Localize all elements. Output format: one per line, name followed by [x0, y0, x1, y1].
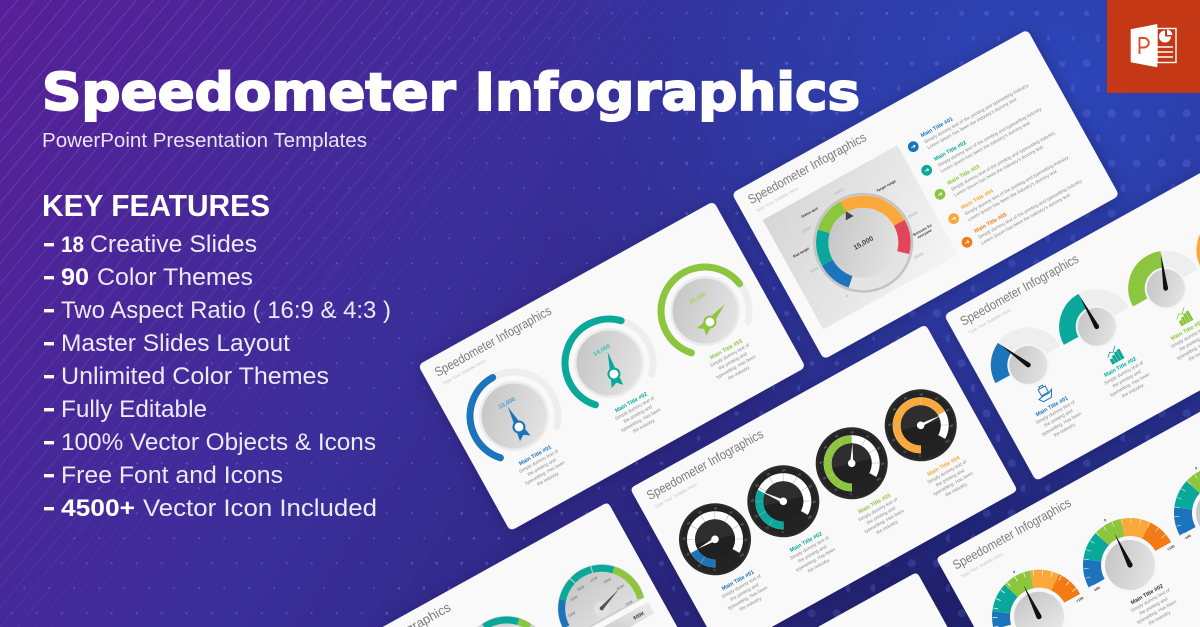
list item 2: Lorem Ipsum has been the industry's dummy text	[940, 120, 1031, 174]
gauge 1 text: Simply dummy text of	[518, 448, 560, 474]
multicolour gauge 3 partially visible: 0	[1194, 466, 1198, 471]
gauge 2 text: Simply dummy text of	[614, 395, 656, 421]
black gauge 3: 10	[833, 487, 838, 492]
black gauge 1: 50	[698, 509, 703, 515]
slide card and heading: Speedometer Infographics	[745, 129, 869, 207]
key features list: Creative Slides	[90, 231, 257, 258]
black gauge 1: 30	[682, 536, 687, 541]
black gauge 1: 100	[738, 552, 745, 558]
list item 5: Lorem Ipsum has been the industry's dummy text	[980, 192, 1072, 246]
panel: slide with needle dials	[418, 201, 806, 531]
gauge range labels: Target range	[876, 179, 897, 193]
multicolour gauge 3 partially visible: -100	[1183, 534, 1192, 541]
gauge 2: 14,000	[593, 343, 612, 358]
gauge 3 text	[706, 336, 760, 386]
multicolour gauge 2: -100	[1092, 586, 1101, 593]
list item 3: Main Title #03	[947, 164, 981, 187]
panel: slide with fan gauges	[944, 151, 1200, 481]
fan gauge 1 text: Main Title #01	[1035, 396, 1069, 418]
half dial gauge 2: 420K	[589, 575, 599, 583]
fan gauge 1 text: the industry.	[1053, 421, 1077, 438]
black gauge 2: 80	[808, 484, 813, 489]
black gauge 4: 60	[919, 392, 924, 397]
fan gauge 2 text	[1100, 354, 1154, 403]
black gauge 2 text: the industry.	[807, 557, 831, 573]
icon: chart green	[1174, 306, 1193, 326]
black gauge 2: 30	[750, 498, 755, 503]
fan gauge 2 text: the printing and	[1112, 369, 1142, 389]
key features list: Color Themes	[97, 264, 253, 291]
multicolour gauge 2 text: Simply dummy text of	[1130, 587, 1171, 613]
gauge range labels: Bad target	[792, 246, 811, 259]
icon: PowerPoint badge	[1107, 0, 1200, 93]
half dial gauge 2: 350K	[576, 584, 586, 592]
list item 5	[958, 172, 1087, 254]
black gauge 4: 100	[944, 438, 951, 444]
slide card and heading: Type Your Subtitle Here	[442, 358, 486, 386]
black gauge 1 text: Main Title #01	[721, 570, 755, 592]
key features list: 90	[61, 264, 89, 291]
key features list: 18	[61, 232, 84, 257]
black gauge 3 text	[854, 491, 908, 540]
list item 2	[918, 100, 1046, 182]
black gauge 1: 90	[744, 537, 749, 542]
list item 4: Simply dummy text of the printing and typesetting industry.	[964, 154, 1070, 216]
black gauge 2: 70	[797, 472, 802, 477]
multicolour gauge 2 text: the industry.	[1148, 609, 1172, 626]
panel: blank slide edge	[818, 574, 948, 627]
black gauge 3	[803, 414, 901, 512]
list item 5: Simply dummy text of the printing and typesetting industry.	[977, 178, 1084, 240]
black gauge 2: 40	[754, 483, 759, 488]
slide card and heading	[944, 151, 1200, 481]
gauge 3	[620, 226, 790, 396]
gauge range labels: Bonuses for	[912, 223, 933, 237]
gauge 3: 20,000	[689, 291, 708, 306]
black gauge 4 text: Simply dummy text of	[926, 459, 968, 485]
multicolour gauge 2 text: typesetting. Has been	[1136, 599, 1178, 625]
slide card clipped at the frame	[383, 504, 677, 627]
black gauge 2 text: Main Title #02	[789, 531, 823, 554]
multicolour gauge 2 text: the printing and	[1138, 596, 1169, 616]
fan gauge 1 text: the printing and	[1043, 408, 1074, 428]
black gauge 4: 20	[891, 438, 896, 443]
black gauge 3: 80	[876, 446, 882, 451]
black gauge 2: 20	[754, 514, 759, 519]
black gauge 1: 0	[713, 568, 716, 572]
list item 2: Main Title #02	[933, 140, 968, 163]
multicolour gauge 2: 0	[1103, 518, 1107, 523]
fan gauge 3	[1123, 244, 1200, 329]
black gauge 3: 40	[823, 445, 828, 450]
black gauge 3: 50	[834, 433, 839, 439]
fan gauge 2 text: typesetting. Has been	[1109, 371, 1151, 398]
panel: slide with half dials	[383, 504, 677, 627]
black gauge 2	[734, 452, 832, 550]
black gauge 1 text	[717, 567, 772, 617]
gauge 2 text: the printing and	[623, 404, 653, 424]
gauge 3 text: the industry.	[727, 364, 751, 381]
panel: slide with segmented ring and list	[732, 29, 1119, 359]
subtitle: PowerPoint Presentation Templates	[42, 130, 367, 152]
black gauge 1: 40	[686, 521, 691, 526]
fan gauge 4 partially visible	[1195, 211, 1200, 289]
gauge 3 text: the printing and	[718, 351, 748, 371]
key features list: Master Slides Layout	[61, 330, 290, 357]
gauge 2 text: typesetting. Has been	[620, 407, 662, 433]
multicolour gauge 2: +100	[1166, 544, 1175, 552]
gauge 1 text: typesetting. Has been	[524, 460, 566, 486]
black gauge 3 text: Simply dummy text of	[857, 496, 899, 522]
multicolour gauge 1 clipped at the frame: +100	[1075, 596, 1084, 603]
black gauge 1 text: the industry.	[739, 595, 763, 612]
list item 4: Lorem Ipsum has been the industry's dummy text	[967, 168, 1058, 222]
value box: 600K	[633, 610, 646, 622]
black gauge 4: 90	[949, 423, 954, 428]
key features list: Fully Editable	[61, 396, 207, 423]
black gauge 3 text: typesetting. Has been	[864, 508, 905, 534]
segmented ring gauge	[784, 164, 942, 322]
black gauge 2: 50	[766, 471, 771, 477]
black gauge 3: 60	[850, 430, 855, 435]
black gauge 3: 30	[818, 460, 823, 465]
multicolour gauge 2 text: Main Title #02	[1130, 584, 1164, 606]
key features list: Unlimited Color Themes	[61, 363, 329, 390]
black gauge 3: 20	[822, 476, 827, 481]
grey chart panel	[763, 145, 958, 329]
slide card and heading: Speedometer Infographics	[957, 251, 1081, 329]
gauge range labels: 5000	[810, 266, 819, 274]
list item 1: Main Title #01	[920, 116, 954, 139]
black gauge 4 text: typesetting. Has been	[933, 470, 974, 497]
gauge range labels: Status quo	[800, 206, 819, 219]
multicolour gauge 1 clipped at the frame	[995, 570, 1084, 627]
gauge 2 text	[611, 389, 665, 439]
gauge range labels	[792, 179, 935, 298]
half dial gauge 1 clipped at the frame	[478, 616, 536, 627]
key features list: Vector Icon Included	[143, 495, 377, 522]
black gauge 3 text: Main Title #03	[858, 493, 892, 516]
multicolour gauge 1 clipped at the frame: 0	[1012, 570, 1016, 574]
black gauge 3 text: the printing and	[866, 505, 896, 525]
key features list: 4500+	[61, 495, 135, 522]
list item 3	[931, 124, 1060, 206]
slide card and heading	[732, 29, 1119, 359]
fan gauge 2	[1053, 282, 1137, 367]
list item 3: Simply dummy text of the printing and typesetting industry.	[950, 130, 1057, 192]
black gauge 2: 90	[812, 499, 817, 504]
multicolour gauge 2	[1058, 493, 1200, 627]
black gauge 4: 40	[892, 407, 897, 412]
black gauge 4: 0	[918, 454, 922, 458]
slide heading: Speedometer Infographics	[644, 426, 766, 503]
icon: hand holding box	[1034, 382, 1055, 403]
black gauge 1 text: the printing and	[729, 582, 760, 602]
black gauge 2 text	[785, 529, 840, 578]
fan gauge 1	[986, 322, 1069, 406]
gauge 1	[429, 331, 599, 501]
black gauge 3: 0	[849, 492, 853, 496]
segmented ring gauge: 15,000	[853, 235, 875, 252]
list item 1	[905, 76, 1033, 159]
half dial gauge 2: 100K	[567, 610, 577, 618]
slide card clipped at the frame	[938, 412, 1200, 627]
gauge 3 text: Main Title #03	[709, 339, 744, 361]
black gauge 2 text: typesetting. Has been	[795, 546, 837, 573]
black gauge 4: 80	[945, 408, 951, 413]
fan gauge 2 text: Simply dummy text of	[1103, 360, 1145, 386]
black gauge 1: 60	[713, 506, 718, 511]
gauge range labels: 30000	[913, 252, 924, 260]
black gauge 2 text: Simply dummy text of	[789, 535, 830, 561]
black gauge 2 text: the printing and	[797, 544, 828, 564]
fan gauge 1 text	[1031, 393, 1086, 443]
key features heading: KEY FEATURES	[42, 188, 270, 223]
black gauge 3: 100	[875, 476, 882, 482]
gauge 3 text: Simply dummy text of	[709, 342, 751, 368]
black gauge 4 text: Main Title #04	[927, 455, 962, 478]
multicolour gauge 3 partially visible	[1149, 441, 1200, 585]
black gauge 4: 50	[903, 395, 908, 401]
key features list: Two Aspect Ratio ( 16:9 & 4:3 )	[61, 297, 391, 324]
black gauge 4: 30	[887, 422, 892, 427]
fan gauge 1 text: Simply dummy text of	[1035, 399, 1076, 425]
list item 5: Main Title #05	[974, 212, 1008, 235]
half dial gauge 2: 600K	[616, 583, 626, 591]
black gauge 1: 70	[728, 510, 734, 515]
gauge 1 text	[515, 442, 569, 492]
key features list: 100% Vector Objects & Icons	[61, 429, 376, 456]
black gauge 4 text: the printing and	[935, 468, 965, 488]
black gauge 4: 10	[902, 449, 907, 454]
half dial gauge 2	[558, 564, 655, 627]
slide card and heading	[418, 201, 806, 531]
key features list	[44, 231, 391, 522]
black gauge 4: 70	[934, 396, 939, 401]
multicolour gauge 2 text	[1126, 581, 1181, 627]
black gauge 1 text: typesetting. Has been	[727, 585, 769, 611]
gauge range labels: 0	[845, 294, 849, 298]
half dial gauge 2: 700K	[625, 599, 634, 607]
black gauge 1 text: Simply dummy text of	[721, 573, 762, 599]
gauge 1 text: the printing and	[527, 457, 557, 477]
key features list: Free Font and Icons	[61, 462, 283, 489]
list item 2: Simply dummy text of the printing and typesetting industry.	[937, 106, 1043, 168]
fan gauge 2 text: the industry.	[1121, 382, 1145, 398]
list item 3: Lorem Ipsum has been the industry's dummy text	[953, 144, 1045, 198]
black gauge 4	[872, 376, 970, 474]
slide heading: Type Your Subtitle Here	[654, 481, 698, 509]
black gauge 3 text: the industry.	[875, 519, 899, 535]
black gauge 2: 60	[781, 468, 787, 473]
gauge 2	[524, 278, 694, 448]
gauge 2 text: Main Title #02	[614, 392, 649, 414]
gauge 1 text: Main Title #01	[518, 445, 553, 467]
half dial gauge 2: 500K	[603, 577, 613, 584]
slide card and heading: Speedometer Infographics	[432, 303, 554, 380]
fan gauge 3 text	[1166, 317, 1200, 367]
gauge range labels: 10000	[801, 226, 812, 234]
gauge 2 text: the industry.	[632, 417, 656, 434]
black gauge 2: 0	[781, 530, 785, 534]
fan gauge 2 text: Main Title #02	[1103, 356, 1138, 379]
panel: slide with black dials	[632, 326, 1016, 627]
black gauge 1	[666, 490, 764, 588]
list item 4: Main Title #04	[960, 188, 996, 211]
gauge range labels: 25000	[907, 211, 918, 219]
black gauge 1: 80	[740, 522, 745, 527]
black gauge 3: 90	[880, 461, 885, 466]
gauge range labels: 15000	[833, 188, 844, 196]
gauge range labels: everyone	[917, 228, 933, 240]
black gauge 4 text	[923, 453, 977, 502]
list item 1: Simply dummy text of the printing and typesetting industry.	[923, 82, 1030, 144]
slide card and heading: Type Your Subtitle Here	[755, 186, 800, 213]
fan gauge 1 text: typesetting. Has been	[1041, 411, 1083, 437]
gauge 3 text: typesetting. Has been	[715, 354, 757, 380]
icon: chart teal	[1105, 345, 1124, 365]
slide heading: Speedometer Infographics	[950, 495, 1074, 573]
black gauge 3: 70	[865, 434, 870, 439]
black gauge 1: 20	[685, 552, 691, 557]
black gauge 4 text: the industry.	[944, 481, 968, 497]
title: Speedometer Infographics	[42, 63, 860, 123]
slide heading: Type Your Subtitle Here	[960, 551, 1004, 579]
slide card clipped at the frame	[632, 326, 1016, 627]
gauge 1: 10,000	[498, 396, 517, 411]
slide card and heading: Type Your Subtitle Here	[967, 307, 1012, 335]
panel: slide with multicolour fans	[938, 412, 1200, 627]
list item 4	[945, 148, 1073, 231]
half dial gauge 2: 200K	[569, 594, 579, 602]
list item 1: Lorem Ipsum has been the industry's dummy text	[926, 96, 1018, 150]
black gauge 1: 10	[697, 563, 702, 568]
gauge 1 text: the industry.	[536, 470, 560, 487]
black gauge 2: 100	[807, 514, 813, 520]
black gauge 2: 10	[765, 525, 770, 530]
